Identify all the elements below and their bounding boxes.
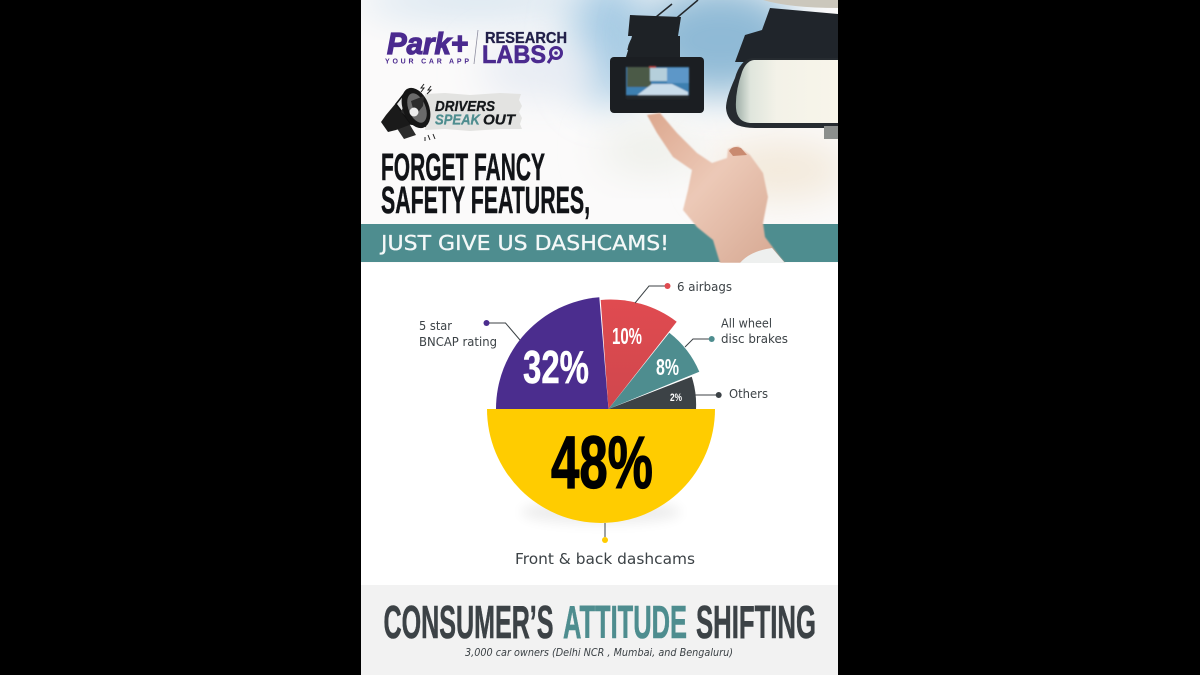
callout: 5 star BNCAP rating: BNCAP rating: [419, 335, 497, 349]
callout: others: [695, 387, 768, 401]
footer heading: SHIFTING: [696, 596, 816, 648]
callout: front and back dashcams: [515, 523, 695, 568]
main heading: [381, 147, 590, 222]
torn paper label: [425, 93, 522, 131]
rear-view mirror mount: [735, 8, 838, 62]
logo: Park+: Park+: [387, 26, 468, 61]
callout: all wheel disc brakes: All wheel: [721, 316, 772, 330]
tag text: drivers speak out: DRIVERS: [435, 98, 495, 115]
pie chart: [487, 297, 715, 524]
sleeve: [740, 248, 785, 263]
hero photo: dashcam and hand: [360, 0, 850, 263]
slice: 32% dark purple: [496, 297, 608, 409]
icon: megaphone: [381, 84, 436, 141]
footer heading: ATTITUDE: [563, 596, 687, 648]
value: 8%: 8%: [656, 354, 679, 380]
hand pointing at dashcam: [647, 113, 785, 263]
callout: all wheel disc brakes: disc brakes: [721, 332, 788, 346]
dashcam mount: [626, 15, 681, 57]
callout: 5 star BNCAP rating: 5 star: [419, 319, 452, 333]
rear-view mirror: [726, 58, 838, 139]
tag text: drivers speak out: SPEAK: [435, 112, 481, 128]
callout: 6 airbags: 6 airbags: [677, 280, 732, 294]
callout: 5 star BNCAP rating: [419, 319, 520, 349]
tag text: drivers speak out: [435, 98, 517, 128]
value: 10%: 10%: [612, 323, 642, 349]
pie shadow: [521, 500, 681, 524]
logo divider: [474, 30, 478, 64]
logo tagline: YOUR CAR APP: [385, 58, 469, 66]
callout: 6 airbags: [635, 280, 732, 303]
poster background: [361, 0, 838, 675]
banner text: JUST GIVE US DASHCAMS!: [379, 231, 669, 255]
logo: Research Labs: LABS: [482, 41, 546, 69]
infographic canvas: [361, 0, 838, 675]
value: 2%: 2%: [670, 392, 682, 404]
teal banner: [361, 224, 838, 262]
footer panel: [361, 585, 838, 675]
slice: 48% yellow: [487, 409, 715, 523]
tag text: drivers speak out: OUT: [483, 112, 517, 128]
slice: 2% charcoal: [608, 377, 696, 409]
dashcam body: [610, 57, 704, 113]
magnifier icon: [548, 48, 562, 63]
main heading: SAFETY FEATURES,: [381, 180, 590, 222]
main heading: FORGET FANCY: [381, 147, 545, 189]
value: 32%: 32%: [523, 341, 589, 393]
callout: others: Others: [729, 387, 768, 401]
sun visor strip: [763, 0, 838, 8]
slice: 10% red: [601, 300, 677, 409]
logo: Research Labs: [482, 30, 567, 69]
slice: 8% teal: [608, 333, 699, 409]
callout: front and back dashcams: Front & back dashcams: [515, 550, 695, 568]
blurred windscreen background: [361, 0, 838, 222]
value: 48%: 48%: [551, 421, 653, 504]
callout: all wheel disc brakes: [685, 316, 788, 347]
dashcam cables: [628, 0, 698, 50]
footer heading: CONSUMER’S: [384, 596, 554, 648]
logo: Research Labs: RESEARCH: [485, 30, 567, 47]
footer subtitle: 3,000 car owners (Delhi NCR , Mumbai, and Bengaluru): [465, 647, 733, 659]
